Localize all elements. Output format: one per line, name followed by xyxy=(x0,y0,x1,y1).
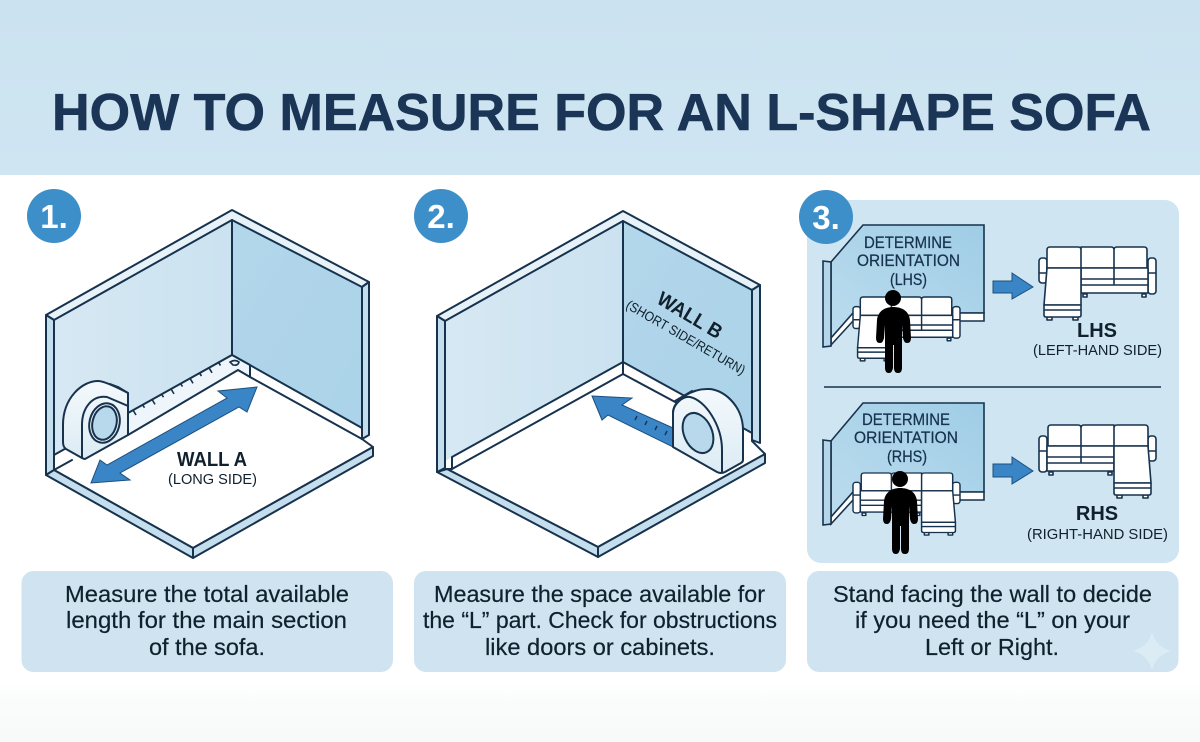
panel 1: measure wall A xyxy=(22,189,393,672)
tape measure body xyxy=(673,389,743,473)
RHS wall text: DETERMINE xyxy=(862,410,950,429)
caption 2: Measure the space available for xyxy=(434,581,765,607)
RHS label xyxy=(1027,503,1168,543)
arrow RHS xyxy=(993,457,1033,484)
tape ruler xyxy=(128,355,250,435)
step badge 1 xyxy=(27,189,81,243)
step badge 2 xyxy=(414,189,468,243)
RHS wall illustration xyxy=(823,403,984,525)
RHS label: RHS xyxy=(1076,503,1118,525)
RHS label: (RIGHT-HAND SIDE) xyxy=(1027,526,1168,543)
large LHS sofa xyxy=(1039,247,1156,320)
RHS wall text: ORIENTATION xyxy=(854,428,958,447)
caption 2: the “L” part. Check for obstructions xyxy=(423,607,777,633)
caption 2: like doors or cabinets. xyxy=(485,634,715,660)
large RHS sofa xyxy=(1039,425,1156,498)
LHS wall text xyxy=(857,233,960,289)
caption 1: Measure the total available xyxy=(65,581,349,607)
orientation background card xyxy=(807,200,1179,563)
caption 3: if you need the “L” on your xyxy=(855,607,1130,633)
step badge 1: 1. xyxy=(40,198,68,235)
step badge 3: 3. xyxy=(812,199,840,236)
wall B label: (SHORT SIDE/RETURN) xyxy=(624,297,748,378)
RHS wall text xyxy=(854,410,958,466)
small LHS sofa xyxy=(853,297,960,361)
room 1 illustration xyxy=(46,210,373,558)
direction arrow with tape ticks xyxy=(592,396,673,447)
LHS label xyxy=(1033,320,1162,359)
person RHS xyxy=(883,471,918,554)
wall A label: (LONG SIDE) xyxy=(168,471,257,488)
header band xyxy=(0,0,1200,175)
caption 3 xyxy=(807,571,1178,672)
panel 3: determine orientation xyxy=(799,190,1179,672)
LHS label: LHS xyxy=(1077,320,1117,342)
RHS wall text: (RHS) xyxy=(887,447,927,466)
wall A label: WALL A xyxy=(177,449,247,471)
LHS wall text: (LHS) xyxy=(890,270,927,289)
arrow LHS xyxy=(993,273,1033,299)
caption 1: length for the main section xyxy=(66,607,347,633)
tape measure body xyxy=(63,381,128,459)
RHS scene xyxy=(823,403,1168,554)
caption 2 xyxy=(414,571,786,672)
step badge 3 xyxy=(799,190,853,244)
room 2 illustration xyxy=(437,211,765,557)
LHS label: (LEFT-HAND SIDE) xyxy=(1033,342,1162,359)
caption 1: of the sofa. xyxy=(149,634,265,660)
title: HOW TO MEASURE FOR AN L-SHAPE SOFA xyxy=(52,84,1151,142)
caption 1 xyxy=(22,571,393,672)
double-headed arrow xyxy=(91,387,257,483)
wall B label: WALL B xyxy=(653,288,726,344)
person LHS xyxy=(876,290,911,373)
wall A label xyxy=(168,449,257,488)
caption 3: Left or Right. xyxy=(925,634,1059,660)
panel 2: measure wall B xyxy=(414,189,786,672)
caption 3: Stand facing the wall to decide xyxy=(833,581,1152,607)
LHS wall text: ORIENTATION xyxy=(857,251,960,270)
background texture strip xyxy=(0,685,1200,742)
LHS wall text: DETERMINE xyxy=(864,233,952,252)
LHS scene xyxy=(823,225,1162,373)
icon: sparkle xyxy=(1133,632,1171,670)
LHS wall illustration xyxy=(823,225,984,347)
small RHS sofa xyxy=(853,473,960,535)
step badge 2: 2. xyxy=(427,198,455,235)
